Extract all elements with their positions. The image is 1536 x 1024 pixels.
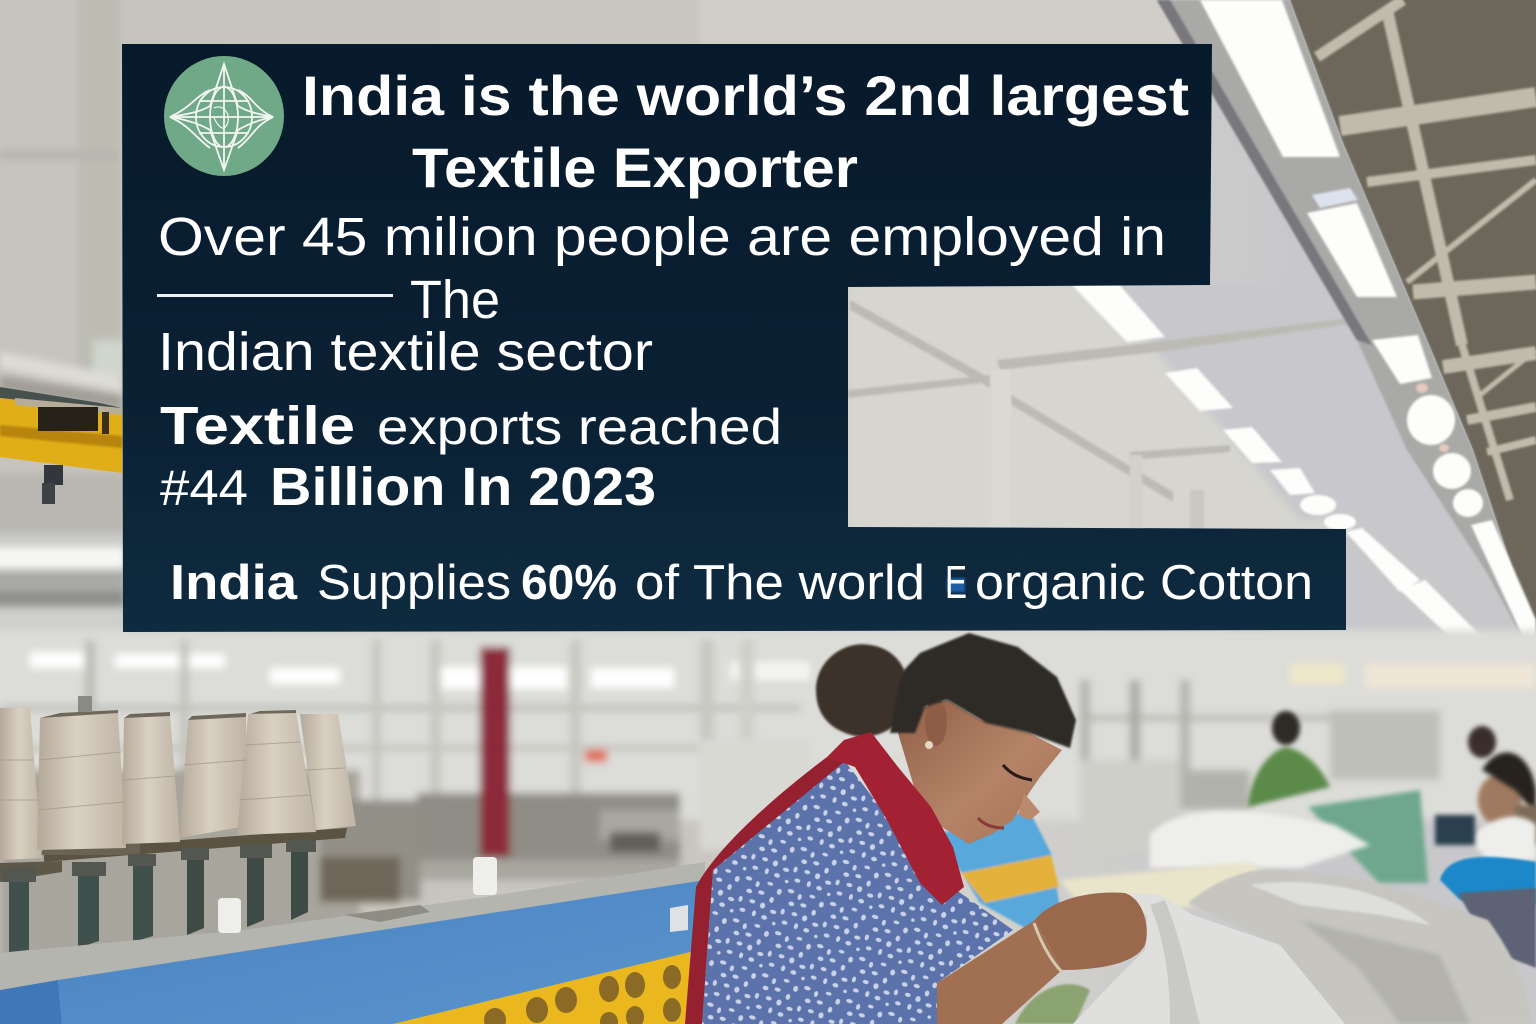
yarn cones on spindles <box>0 696 356 952</box>
light rail with fixtures <box>1157 0 1536 665</box>
bangle <box>1034 923 1062 972</box>
shirt <box>702 760 1013 1024</box>
background workers and fabric piles <box>1060 711 1536 1024</box>
green fabric in bin <box>1015 984 1090 1024</box>
red scarf at neck <box>827 732 964 905</box>
forearm <box>937 920 1062 1024</box>
ceiling light strips <box>1072 282 1536 684</box>
organic cotton statistic <box>170 556 1313 610</box>
woman inspecting fabric <box>685 633 1345 1024</box>
exports statistic: Billion In 2023 <box>270 457 656 517</box>
white cloth in hand <box>1073 893 1345 1024</box>
title: Textile Exporter <box>412 136 858 199</box>
hair bun <box>816 644 909 737</box>
organic cotton statistic: organic Cotton <box>975 556 1313 610</box>
organic cotton statistic: of The world <box>635 556 925 610</box>
organic cotton statistic: India <box>170 556 298 610</box>
organic cotton statistic: 60% <box>521 556 617 610</box>
hand <box>1035 892 1147 970</box>
dark text panel <box>122 44 1346 632</box>
scarf strap <box>685 757 844 1024</box>
employment statistic <box>157 207 1166 382</box>
exports statistic: Textile <box>160 396 355 456</box>
employment statistic: The <box>410 270 500 330</box>
exports statistic <box>160 396 782 517</box>
title <box>302 64 1189 199</box>
employment statistic: Over 45 milion people are employed in <box>158 207 1166 267</box>
title: India is the world’s 2nd largest <box>302 64 1189 127</box>
logo: green circle with white star globe <box>164 56 284 176</box>
exports statistic: exports reached <box>377 399 782 455</box>
hair <box>890 633 1076 748</box>
blurred factory floor in the distance <box>0 473 1536 960</box>
organic cotton statistic: E <box>945 556 967 608</box>
employment statistic: Indian textile sector <box>158 322 653 382</box>
blue carding machine with yellow perforated panel <box>0 857 705 1024</box>
organic cotton statistic: Supplies <box>317 556 511 610</box>
exports statistic: #44 <box>160 460 248 516</box>
roof truss, upper right <box>1290 0 1536 640</box>
blue and yellow cloth behind the woman <box>942 810 1062 930</box>
yellow machine arm, left edge <box>0 387 122 504</box>
face <box>898 700 1062 844</box>
